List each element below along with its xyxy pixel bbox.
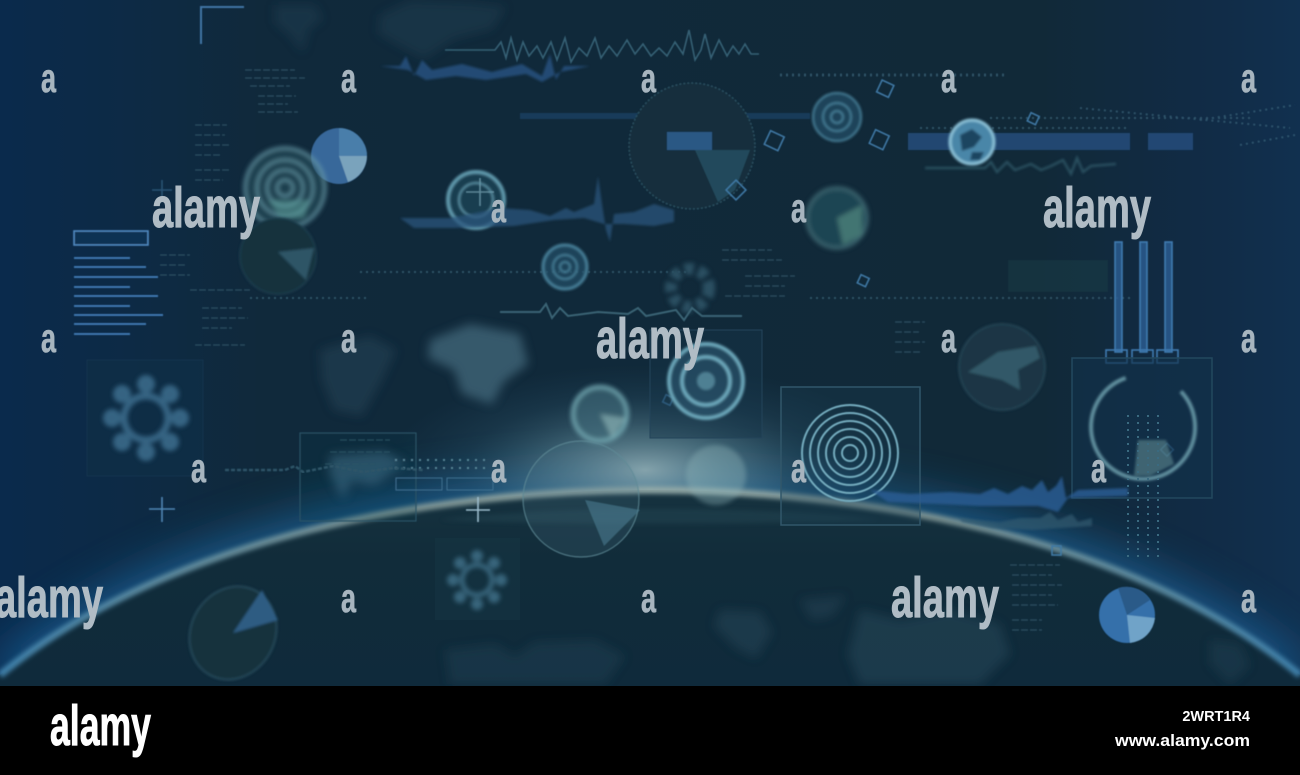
small radar left — [240, 218, 316, 294]
watermark wordmarks — [0, 176, 1151, 630]
code panels — [160, 70, 1062, 630]
pie top left — [311, 128, 367, 184]
watermark wordmarks: alamy — [1043, 176, 1151, 240]
target panel center — [650, 330, 762, 438]
watermark tile letters: a — [41, 55, 57, 101]
site url: www.alamy.com — [1114, 732, 1250, 750]
blurred pie behind glow — [686, 445, 746, 505]
bottom black bar — [0, 686, 1300, 775]
diamonds — [663, 80, 1173, 555]
watermark tile letters: a — [1241, 315, 1257, 361]
gear panel left — [87, 360, 203, 476]
watermark tile letters: a — [941, 315, 957, 361]
pie lower right — [1099, 587, 1155, 643]
data streaks — [520, 113, 1193, 150]
corner bracket — [201, 7, 244, 44]
globe — [0, 490, 1300, 686]
concentric target panel — [781, 387, 920, 525]
watermark tile letters: a — [641, 575, 657, 621]
watermark tile letters: a — [1091, 445, 1107, 491]
watermark tile letters: a — [1241, 575, 1257, 621]
alamy logo: alamy — [50, 694, 151, 758]
watermark tile letters: a — [491, 185, 507, 231]
gear lower center — [435, 538, 520, 620]
watermark tile letters: a — [341, 575, 357, 621]
watermark tile letters: a — [341, 315, 357, 361]
green block — [1008, 260, 1108, 292]
big panel right — [1072, 356, 1214, 558]
radar lower left — [173, 570, 293, 696]
radar top center — [629, 83, 755, 209]
world map fragments — [275, 1, 1250, 684]
vertical HUD axis — [192, 112, 194, 584]
thin waveform center — [500, 304, 742, 320]
globe ball top right — [950, 120, 994, 164]
image id: 2WRT1R4 — [1182, 709, 1250, 725]
watermark tile letters: a — [41, 315, 57, 361]
waveform top — [445, 30, 759, 62]
watermark tile letters: a — [491, 445, 507, 491]
watermark tile letters: a — [791, 185, 807, 231]
target center — [448, 172, 504, 228]
center waveform — [400, 176, 674, 242]
mid right waveform — [925, 158, 1116, 174]
gear blurred center — [671, 269, 709, 307]
target rings top — [813, 93, 861, 141]
watermark wordmarks: alamy — [891, 566, 999, 630]
watermark wordmarks: alamy — [596, 307, 704, 371]
dotted data streams — [250, 75, 1295, 298]
radar right of center — [807, 188, 867, 248]
watermark wordmarks: alamy — [152, 176, 260, 240]
horizontal HUD axis — [137, 564, 982, 566]
big radar on horizon — [523, 441, 640, 557]
radar mid right — [959, 324, 1045, 410]
waveform blue top-left — [380, 54, 590, 82]
left list panel — [74, 231, 163, 334]
blurred ring center — [573, 387, 627, 441]
watermark tile letters: a — [341, 55, 357, 101]
lower panel left of horizon — [300, 433, 493, 521]
mixer sliders — [1106, 242, 1178, 363]
small target — [543, 245, 587, 289]
target rings left — [245, 148, 325, 228]
blue waveform lower right — [870, 476, 1128, 512]
watermark tile letters — [41, 55, 1257, 621]
crosshairs — [149, 178, 494, 522]
watermark tile letters: a — [191, 445, 207, 491]
watermark tile letters: a — [1241, 55, 1257, 101]
lower left waveform — [225, 466, 423, 472]
watermark tile letters: a — [941, 55, 957, 101]
watermark tile letters: a — [641, 55, 657, 101]
watermark tile letters: a — [791, 445, 807, 491]
atmosphere glow — [0, 365, 1300, 686]
